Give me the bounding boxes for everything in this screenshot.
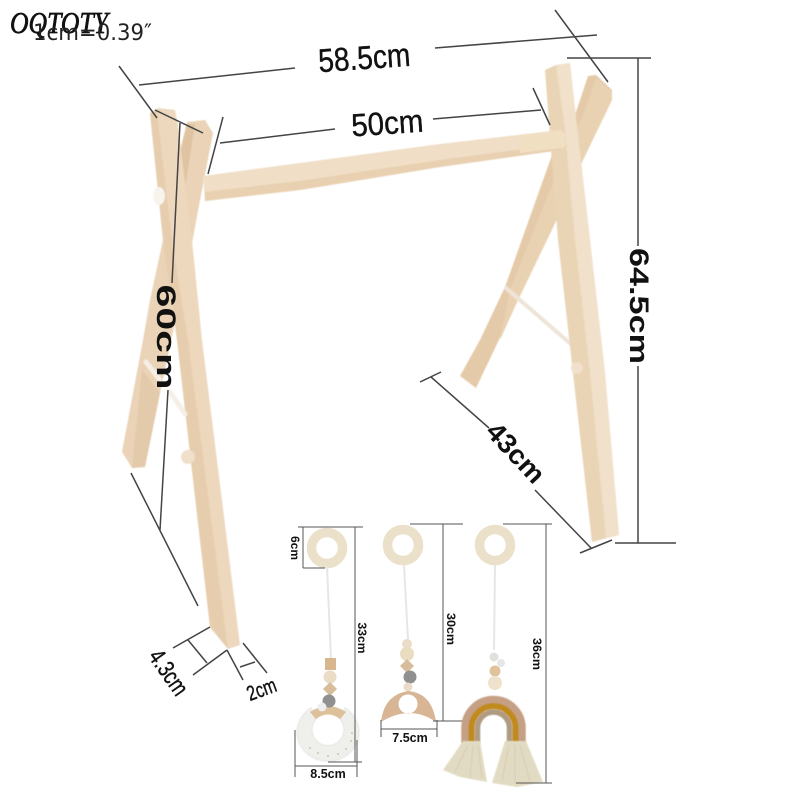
toy 2: moon hanger — [381, 530, 436, 722]
dimension: 43cm base — [420, 372, 612, 553]
rainbow stripes — [465, 700, 522, 743]
left front leg shaded edge — [150, 111, 228, 649]
string — [327, 566, 331, 660]
left back leg top shade — [165, 124, 195, 250]
left peg lower — [181, 450, 195, 464]
crossbar body — [203, 130, 566, 201]
dimension: 50cm bar length: 50cm — [350, 103, 424, 143]
dimension: 2cm leg depth — [227, 643, 280, 706]
right tassel — [492, 741, 543, 787]
dimension: 64.5cm height: 64.5cm — [624, 248, 654, 364]
crossbar end glow — [520, 130, 566, 153]
string — [494, 565, 495, 650]
dimension: 50cm bar length — [208, 88, 550, 174]
right back leg light face — [500, 78, 612, 340]
toy 3 labels — [503, 524, 552, 783]
toy 2 labels: 7.5cm — [392, 731, 428, 745]
left back leg lower shade — [132, 370, 160, 468]
unit conversion note: 1cm=0.39″ — [33, 21, 152, 46]
wooden ring — [480, 530, 510, 560]
wooden frame: right A-frame — [460, 63, 619, 542]
left tassel — [443, 741, 487, 782]
dimension: 4.3cm leg width — [143, 627, 227, 701]
toy 1 labels — [288, 527, 369, 781]
left rope — [146, 362, 185, 414]
dimension: 58.5cm overall width: 58.5cm — [317, 36, 411, 79]
string — [404, 565, 408, 640]
dimension: 60cm leg length: 60cm — [151, 284, 181, 390]
toy 1 labels: 8.5cm — [310, 767, 346, 781]
brand watermark: OQTOTY — [10, 5, 110, 40]
right peg — [571, 362, 583, 374]
wooden arc — [310, 706, 346, 719]
right rope — [506, 288, 572, 345]
wooden frame: crossbar — [203, 130, 566, 201]
white felt crescent — [297, 708, 359, 761]
toy 3: rainbow hanger — [443, 530, 543, 787]
left peg upper — [153, 187, 165, 205]
wooden frame: left A-frame — [122, 108, 240, 649]
felt stitch dots — [309, 732, 353, 757]
dimension: 60cm leg length — [131, 110, 203, 606]
wooden moon — [381, 691, 436, 722]
wooden ring — [312, 532, 342, 564]
toy 1: teether ring hanger — [297, 532, 359, 761]
toy 1 labels: 33cm — [355, 622, 369, 654]
beads — [318, 658, 337, 712]
wooden ring — [388, 530, 418, 560]
dimension: 2cm leg depth: 2cm — [244, 674, 280, 706]
toy 3 labels: 36cm — [530, 638, 544, 670]
left back leg — [122, 120, 213, 468]
dimension: 64.5cm height — [567, 58, 676, 543]
right front leg — [545, 63, 619, 542]
toy 2 labels — [381, 524, 463, 745]
dimension: 43cm base: 43cm — [480, 416, 551, 489]
right back leg — [460, 75, 612, 388]
right front leg light face — [556, 63, 619, 538]
dimension: 58.5cm overall width — [119, 10, 608, 118]
toy 2 labels: 30cm — [444, 613, 458, 645]
beads — [400, 639, 416, 692]
crossbar under shade — [205, 144, 561, 201]
toy 1 labels: 6cm — [288, 536, 302, 560]
dimension: 4.3cm leg width: 4.3cm — [143, 644, 194, 701]
beads — [488, 652, 505, 690]
left front leg — [150, 108, 240, 649]
